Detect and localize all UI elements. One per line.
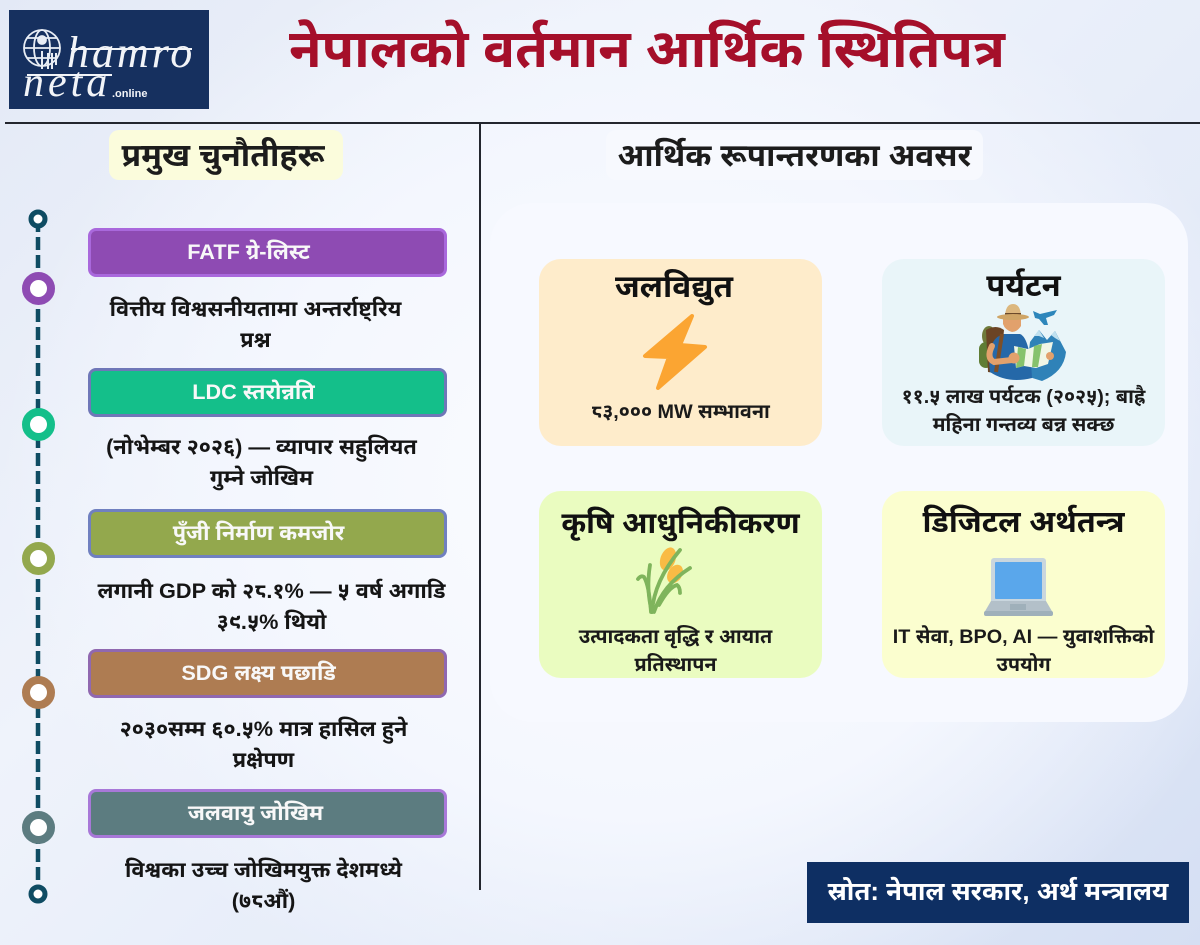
challenge 1 label xyxy=(88,228,447,277)
card: hydropower xyxy=(539,259,822,446)
challenge 5 text: (७८औं) xyxy=(232,888,295,913)
challenge 2 text xyxy=(106,434,418,490)
challenge 3 text xyxy=(98,578,446,634)
challenge 3 label xyxy=(88,509,447,558)
hands xyxy=(1008,352,1020,364)
challenge 5 text xyxy=(125,857,402,913)
card heading: कृषि आधुनिकीकरण xyxy=(561,507,800,540)
icon: grain stalks xyxy=(636,547,692,614)
card text: IT सेवा, BPO, AI — युवाशक्तिको xyxy=(893,626,1154,648)
card: agriculture xyxy=(539,491,822,678)
logo text: online: .online xyxy=(112,88,147,100)
source box xyxy=(807,862,1189,923)
card text: प्रतिस्थापन xyxy=(634,654,717,676)
icon: laptop xyxy=(984,558,1053,616)
card text xyxy=(893,625,1154,676)
timeline node 5 xyxy=(22,811,55,844)
card heading: डिजिटल अर्थतन्त्र xyxy=(922,505,1125,539)
challenge 5 label xyxy=(88,789,447,838)
timeline node 1 xyxy=(22,272,55,305)
backpack xyxy=(982,326,996,346)
plane xyxy=(1033,310,1057,325)
title: नेपालको वर्तमान आर्थिक स्थितिपत्र xyxy=(289,20,1005,79)
torso xyxy=(989,334,1032,380)
logo text: hamro: hamro xyxy=(67,28,195,77)
challenge 4 text: प्रक्षेपण xyxy=(233,747,294,772)
arms xyxy=(989,346,1012,362)
card text xyxy=(578,625,773,676)
timeline node 3 xyxy=(22,542,55,575)
icon: backpacker with map xyxy=(979,304,1066,381)
challenge 4 label xyxy=(88,649,447,698)
logo xyxy=(9,10,209,109)
card: digital economy xyxy=(882,491,1165,678)
icon: globe xyxy=(23,29,61,69)
heading: opportunities: आर्थिक रूपान्तरणका अवसर xyxy=(618,137,971,173)
card: tourism xyxy=(882,259,1165,446)
challenge 4 text xyxy=(120,716,408,772)
logo rule: upper xyxy=(71,48,192,50)
challenge 3 text: लगानी GDP को २८.१% — ५ वर्ष अगाडि xyxy=(98,578,445,603)
card heading: पर्यटन xyxy=(986,268,1061,303)
logo rule: lower xyxy=(27,74,112,76)
header divider xyxy=(5,122,1200,124)
timeline node 2 xyxy=(22,408,55,441)
heading: opportunities xyxy=(606,130,983,180)
challenge 2 label xyxy=(88,368,447,417)
timeline node 4 xyxy=(22,676,55,709)
card heading: जलविद्युत xyxy=(615,268,733,304)
challenge 5 text: विश्वका उच्च जोखिमयुक्त देशमध्ये xyxy=(125,857,402,882)
challenge 1 text: वित्तीय विश्वसनीयतामा अन्तर्राष्ट्रिय xyxy=(110,296,401,321)
challenge 3 text: ३९.५% थियो xyxy=(217,609,326,634)
challenge 5 label: जलवायु जोखिम xyxy=(188,800,323,825)
challenge 4 text: २०३०सम्म ६०.५% मात्र हासिल हुने xyxy=(120,716,407,741)
card text: महिना गन्तव्य बन्न सक्छ xyxy=(933,414,1114,436)
card text: उत्पादकता वृद्धि र आयात xyxy=(579,626,772,648)
card text: ८३,००० MW सम्भावना xyxy=(591,401,770,423)
challenge 2 text: गुम्ने जोखिम xyxy=(210,465,313,490)
timeline xyxy=(28,210,48,904)
card text: उपयोग xyxy=(996,654,1051,676)
logo text: neta: neta xyxy=(23,60,111,106)
source box: स्रोत: नेपाल सरकार, अर्थ मन्त्रालय xyxy=(828,878,1168,906)
icon: lightning bolt xyxy=(642,314,708,390)
card text: ११.५ लाख पर्यटक (२०२५); बाह्रै xyxy=(902,386,1145,408)
map xyxy=(1014,342,1053,368)
panel: opportunities xyxy=(490,203,1188,722)
heading: main challenges xyxy=(109,130,343,180)
card text xyxy=(902,384,1146,436)
mountains xyxy=(1026,330,1066,381)
head and hat xyxy=(1003,318,1021,332)
column divider xyxy=(479,123,481,890)
heading: main challenges: प्रमुख चुनौतीहरू xyxy=(121,137,324,173)
challenge 2 text: (नोभेम्बर २०२६) — व्यापार सहुलियत xyxy=(106,434,417,459)
challenge 3 label: पुँजी निर्माण कमजोर xyxy=(173,520,344,545)
challenge 2 label: LDC स्तरोन्नति xyxy=(192,379,315,404)
challenge 1 label: FATF ग्रे-लिस्ट xyxy=(187,239,310,264)
challenge 1 text xyxy=(110,296,402,352)
challenge 1 text: प्रश्न xyxy=(240,327,271,352)
challenge 4 label: SDG लक्ष्य पछाडि xyxy=(181,660,336,685)
